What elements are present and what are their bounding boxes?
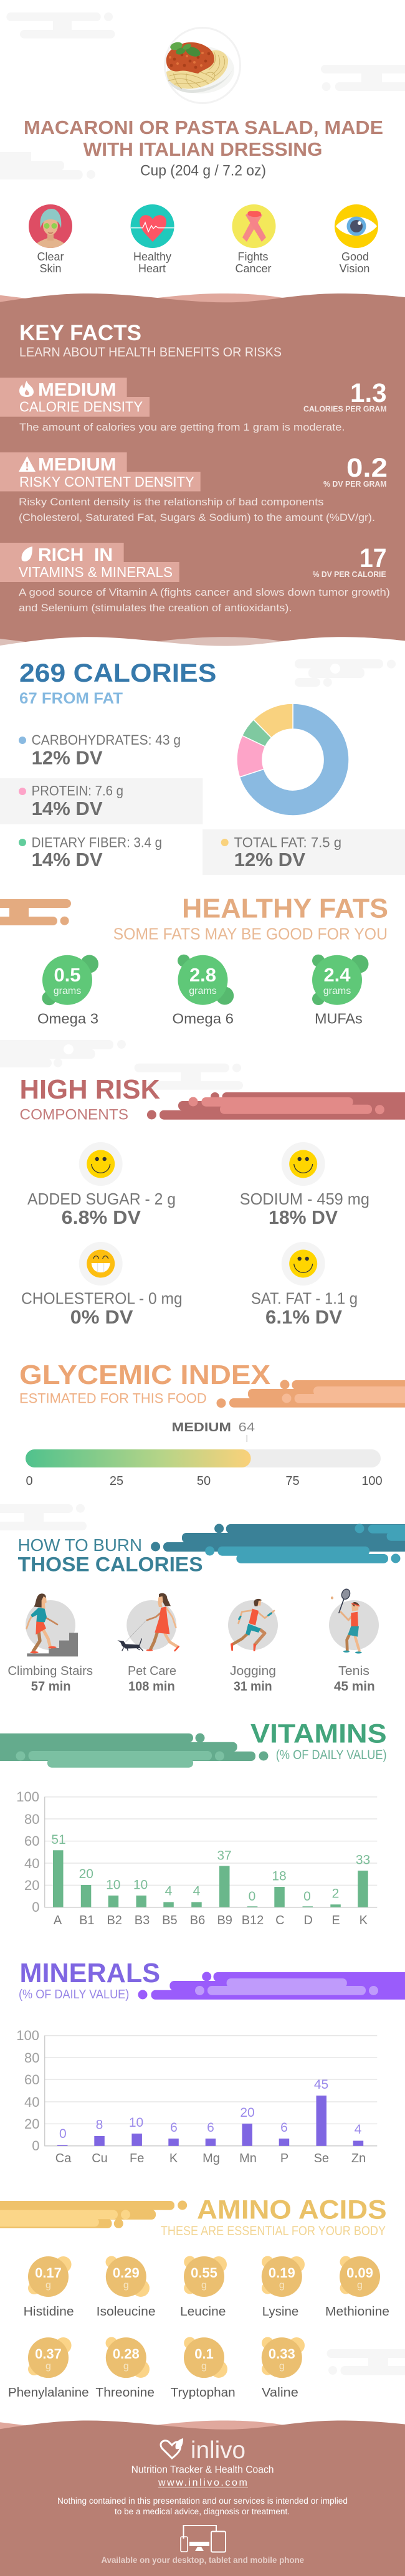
activity: jogging (228, 1599, 278, 1694)
bar chart: vitamins: A (54, 1914, 62, 1927)
bar chart: minerals: Mg (202, 2152, 220, 2165)
title: MACARONI OR PASTA SALAD, MADE (24, 117, 383, 138)
fact: rich in vitamins and minerals: RICH IN (38, 545, 113, 565)
banner decoration: amino acids (0, 2201, 187, 2228)
benefit labels: Cancer (235, 262, 272, 275)
macro: dietary fiber: 14% DV (32, 849, 103, 871)
fact: calorie density: CALORIES PER GRAM (303, 404, 387, 414)
subheading: from fat: 67 FROM FAT (19, 690, 123, 707)
bar chart: vitamins: 40 (24, 1856, 40, 1871)
risk: sodium (240, 1142, 369, 1228)
gauge scale: 25 (110, 1474, 123, 1488)
amino: threonine: g (123, 2361, 129, 2372)
bar chart: vitamins: 20 (24, 1877, 40, 1893)
subheading: (% OF DAILY VALUE) (19, 1988, 129, 2001)
website link: www.inlivo.com (158, 2478, 247, 2488)
amino: leucine: g (201, 2280, 207, 2291)
amino: threonine (95, 2337, 155, 2400)
amino: phenylalanine (8, 2337, 89, 2400)
subheading: components: COMPONENTS (20, 1107, 128, 1123)
amino: isoleucine: Isoleucine (97, 2305, 156, 2319)
amino: methionine: 0.09 (346, 2265, 373, 2281)
activity: pet care (117, 1593, 179, 1694)
panel: high risk components (20, 1074, 405, 1328)
activity: tennis (329, 1588, 379, 1694)
benefit labels: Healthy (133, 250, 171, 263)
panel: key facts (0, 293, 405, 651)
amino: tryptophan: g (201, 2361, 207, 2372)
icon: tennis player (331, 1588, 362, 1654)
benefit labels (37, 250, 369, 275)
bar chart: minerals: 20 (24, 2116, 40, 2132)
activity: climbing stairs: Climbing Stairs (7, 1664, 93, 1678)
panel: minerals (16, 1958, 405, 2165)
gauge scale: 0 (26, 1474, 33, 1488)
heading: calories: 269 CALORIES (19, 658, 216, 687)
bar chart: minerals: 45 (314, 2077, 328, 2092)
icon: warning triangle (19, 456, 36, 472)
bar chart: minerals: 60 (24, 2072, 40, 2087)
bar chart: vitamins: K (360, 1914, 368, 1927)
bar chart: vitamins: C (275, 1914, 285, 1927)
icon: ribbon (232, 204, 275, 248)
bar chart: vitamins: 2 (332, 1887, 339, 1901)
tagline: Nutrition Tracker & Health Coach (131, 2464, 274, 2476)
risk: added sugar: 6.8% DV (62, 1207, 141, 1228)
stat: omega 3: Omega 3 (37, 1011, 98, 1027)
heading: minerals: MINERALS (20, 1958, 160, 1988)
activity: climbing stairs: 57 min (31, 1679, 71, 1694)
panel: burn calories (7, 1524, 405, 1694)
fact: risky content density: (Cholesterol, Saturated Fat, Sugars & Sodium) to the amount (%DV/gr). (19, 512, 375, 523)
benefit labels: Good (341, 250, 369, 263)
bar chart: vitamins: 100 (16, 1789, 39, 1805)
bar chart: minerals: Fe (130, 2152, 144, 2165)
amino: histidine (24, 2256, 74, 2319)
heading: glycemic index: GLYCEMIC INDEX (19, 1360, 270, 1390)
icon: leaf (22, 546, 32, 561)
amino: histidine: Histidine (24, 2305, 74, 2319)
activity: tennis: Tenis (338, 1664, 369, 1678)
gauge scale: 100 (361, 1474, 383, 1488)
benefit labels: Heart (138, 262, 166, 275)
fact: calorie density: The amount of calories you are getting from 1 gram is moderate. (19, 421, 345, 433)
icon: grinning smiley (87, 1250, 115, 1277)
health benefits icons (29, 204, 378, 275)
bar chart: minerals: 0 (59, 2127, 67, 2141)
disclaimer: Nothing contained in this presentation and our services is intended or implied (57, 2496, 348, 2506)
bar chart: minerals: Se (314, 2152, 329, 2165)
subheading: ESTIMATED FOR THIS FOOD (19, 1391, 207, 1406)
amino: tryptophan: 0.1 (194, 2346, 214, 2362)
amino: valine: 0.33 (269, 2346, 295, 2362)
amino: methionine: Methionine (325, 2305, 389, 2319)
risk: sodium: 18% DV (269, 1207, 338, 1228)
stat: omega 6: grams (189, 986, 217, 996)
amino: isoleucine: g (123, 2280, 129, 2291)
fact: risky content density: RISKY CONTENT DENSITY (19, 474, 194, 490)
fact: calorie density: CALORIE DENSITY (19, 399, 143, 415)
activity: jogging: Jogging (230, 1664, 276, 1678)
activity: tennis: 45 min (334, 1679, 375, 1694)
amino: methionine (325, 2256, 389, 2319)
macro: carbohydrates: 12% DV (32, 748, 103, 769)
amino: lysine (262, 2256, 305, 2319)
bar chart: vitamins: E (331, 1914, 340, 1927)
heading: healthy fats: HEALTHY FATS (182, 894, 388, 924)
macro: carbohydrates: CARBOHYDRATES: 43 g (32, 732, 181, 748)
gauge scale (26, 1474, 383, 1488)
benefit labels: Vision (340, 262, 369, 275)
amino: leucine: Leucine (180, 2305, 226, 2319)
macro: dietary fiber: DIETARY FIBER: 3.4 g (32, 834, 162, 850)
bar chart: minerals: Ca (55, 2152, 72, 2165)
amino: threonine: Threonine (95, 2386, 155, 2400)
panel: footer (0, 2420, 405, 2576)
fact: rich in vitamins and minerals: VITAMINS & MINERALS (19, 564, 173, 580)
subheading: SOME FATS MAY BE GOOD FOR YOU (113, 925, 388, 943)
stat: omega 3 (37, 955, 98, 1027)
bar chart: minerals: 6 (170, 2120, 178, 2135)
food photo: spaghetti plate (164, 27, 241, 103)
logo: inlivo: inlivo (191, 2437, 245, 2464)
stat: mufas: grams (323, 986, 351, 996)
bar chart: vitamins: 10 (133, 1878, 148, 1892)
fact: risky content density: MEDIUM (38, 455, 117, 475)
heading: how to burn: HOW TO BURN (18, 1535, 142, 1555)
stat: omega 6 (172, 955, 234, 1027)
serving size: Cup (204 g / 7.2 oz) (140, 162, 266, 179)
bar chart: vitamins: D (303, 1914, 313, 1927)
amino: valine: Valine (262, 2386, 298, 2400)
title (24, 117, 383, 160)
amino: histidine: 0.17 (35, 2265, 62, 2281)
fact: calorie density (0, 378, 387, 433)
amino: lysine: g (279, 2280, 285, 2291)
disclaimer: to be a medical advice, diagnosis or treatment. (115, 2507, 290, 2516)
stat: omega 6: 2.8 (189, 964, 216, 986)
stat: mufas (312, 955, 369, 1027)
panel: calories (0, 658, 405, 875)
amino: valine: g (279, 2361, 285, 2372)
icon: healthy heart (131, 204, 174, 248)
bar chart: vitamins: 0 (32, 1899, 40, 1915)
bar chart: minerals: 80 (24, 2050, 40, 2066)
fact: risky content density: 0.2 (346, 453, 388, 483)
icon: eye (335, 204, 378, 248)
fact: rich in vitamins and minerals: A good source of Vitamin A (fights cancer and slows down tumor growth) (19, 586, 390, 598)
macro: protein (19, 783, 123, 819)
amino: lysine: 0.19 (269, 2265, 295, 2281)
bar chart: minerals: 6 (280, 2120, 288, 2135)
icon: devices (181, 2526, 226, 2552)
bar chart: vitamins: B12 (242, 1914, 264, 1927)
amino: threonine: 0.28 (113, 2346, 140, 2362)
bar chart: vitamins: 10 (106, 1878, 120, 1892)
bar chart: vitamins: B9 (217, 1914, 232, 1927)
fact: risky content density: % DV PER GRAM (323, 479, 387, 489)
bar chart: vitamins: B1 (79, 1914, 95, 1927)
fact: calorie density: 1.3 (350, 378, 387, 408)
macro: total fat: 12% DV (234, 849, 306, 871)
panel: glycemic index (19, 1360, 405, 1488)
benefit labels: Fights (237, 250, 269, 263)
amino: methionine: g (357, 2280, 363, 2291)
heading: those calories: THOSE CALORIES (18, 1553, 202, 1576)
banner decoration: burn (151, 1524, 405, 1563)
bar chart: vitamins: 33 (356, 1853, 370, 1867)
bar chart: vitamins: 20 (79, 1867, 93, 1881)
bar chart: minerals: P (280, 2152, 288, 2165)
subheading: LEARN ABOUT HEALTH BENEFITS OR RISKS (19, 345, 282, 360)
stat: mufas: 2.4 (323, 964, 351, 986)
heading: vitamins: VITAMINS (250, 1720, 387, 1749)
macro: dietary fiber (19, 834, 162, 871)
fact: rich in vitamins and minerals (0, 543, 390, 614)
bar chart: vitamins: B5 (162, 1914, 178, 1927)
macro: total fat (221, 834, 341, 871)
panel: vitamins (0, 1720, 387, 1927)
title: WITH ITALIAN DRESSING (83, 138, 323, 160)
activity: pet care: Pet Care (128, 1664, 176, 1678)
logo: inlivo (161, 2437, 245, 2464)
gauge scale: 75 (285, 1474, 300, 1488)
gauge label: 64 (239, 1421, 255, 1434)
panel: amino acids (0, 2195, 389, 2400)
stat: omega 3: grams (54, 986, 81, 996)
bar chart: minerals: 100 (16, 2028, 39, 2043)
availability note: Available on your desktop, tablet and mobile phone (101, 2555, 304, 2565)
fact: calorie density: MEDIUM (38, 380, 117, 400)
risk: saturated fat: 6.1% DV (265, 1307, 343, 1328)
bar chart: vitamins: B6 (190, 1914, 205, 1927)
bar chart: vitamins: 80 (24, 1811, 40, 1827)
amino: leucine: 0.55 (191, 2265, 217, 2281)
panel: healthy fats (0, 894, 388, 1027)
banner decoration: healthy fats (0, 899, 71, 925)
risk: cholesterol (21, 1242, 183, 1328)
macro: total fat: TOTAL FAT: 7.5 g (234, 834, 341, 850)
amino: tryptophan (171, 2337, 236, 2400)
amino: histidine: g (45, 2280, 51, 2291)
amino: isoleucine: 0.29 (113, 2265, 140, 2281)
fact: rich in vitamins and minerals: and Selenium (stimulates the creation of antioxidants). (19, 602, 292, 614)
heading: key facts: KEY FACTS (19, 321, 141, 345)
banner decoration: vitamins (0, 1734, 268, 1768)
bar chart: vitamins: 0 (303, 1889, 311, 1904)
amino: phenylalanine: 0.37 (35, 2346, 62, 2362)
amino: isoleucine (97, 2256, 156, 2319)
icon: smiley (289, 1250, 317, 1277)
heading: high risk: HIGH RISK (20, 1074, 160, 1105)
bar chart: minerals: Mn (239, 2152, 257, 2165)
bar chart: vitamins: 0 (249, 1889, 255, 1904)
risk: sodium: SODIUM - 459 mg (240, 1190, 369, 1208)
icon: woman climbing stairs (27, 1593, 78, 1656)
activity: jogging: 31 min (234, 1679, 272, 1694)
bar chart: vitamins: B2 (107, 1914, 122, 1927)
bar chart: minerals: Cu (92, 2152, 108, 2165)
donut chart (237, 704, 349, 816)
gauge label (172, 1421, 255, 1442)
macro: carbohydrates (19, 732, 181, 769)
bar chart: vitamins: 51 (51, 1833, 66, 1847)
benefit labels: Clear (37, 250, 64, 263)
risk: saturated fat: SAT. FAT - 1.1 g (251, 1289, 358, 1308)
heading: amino acids: AMINO ACIDS (197, 2195, 387, 2225)
banner decoration: minerals (138, 1972, 405, 2000)
bar chart: minerals (16, 2028, 377, 2165)
bar chart: vitamins: 4 (193, 1884, 201, 1898)
macro: protein: 14% DV (32, 798, 103, 819)
amino: tryptophan: Tryptophan (171, 2386, 236, 2400)
bar chart: minerals: 40 (24, 2094, 40, 2110)
legend row backgrounds (0, 778, 405, 875)
fact: rich in vitamins and minerals: 17 (360, 543, 387, 573)
icon: flame (19, 381, 34, 397)
icon: clear skin (29, 204, 72, 249)
bar chart: vitamins: B3 (135, 1914, 150, 1927)
fact: rich in vitamins and minerals: % DV PER CALORIE (313, 570, 386, 579)
subheading: (% OF DAILY VALUE) (276, 1748, 387, 1762)
risk: cholesterol: CHOLESTEROL - 0 mg (21, 1289, 183, 1308)
risk: added sugar: ADDED SUGAR - 2 g (27, 1190, 176, 1208)
fact: risky content density: Risky Content density is the relationship of bad components (19, 496, 324, 508)
amino: lysine: Lysine (262, 2305, 298, 2319)
glycemic gauge bar (26, 1449, 381, 1467)
bar chart: minerals: Zn (351, 2152, 366, 2165)
icon: jogger (231, 1599, 274, 1651)
benefit labels: Skin (39, 262, 62, 275)
amino: phenylalanine: Phenylalanine (8, 2386, 89, 2400)
bar chart: minerals: K (169, 2152, 178, 2165)
risk: cholesterol: 0% DV (70, 1307, 133, 1328)
bar chart: minerals: 20 (240, 2106, 255, 2120)
bar chart: minerals: 0 (32, 2138, 40, 2154)
icon: smiley (87, 1150, 115, 1178)
stat: mufas: MUFAs (315, 1011, 363, 1027)
activity: pet care: 108 min (128, 1679, 175, 1694)
risk: saturated fat (251, 1242, 358, 1328)
bar chart: minerals: 10 (129, 2116, 143, 2130)
bar chart: vitamins: 60 (24, 1833, 40, 1849)
banner decoration: high risk (147, 1092, 405, 1120)
bar chart: vitamins: 18 (272, 1869, 287, 1884)
icon: woman walking dog (117, 1593, 179, 1651)
bar chart: minerals: 8 (96, 2117, 103, 2132)
gauge label: MEDIUM (172, 1421, 231, 1434)
banner decoration: glycemic (217, 1380, 405, 1408)
macro: protein: PROTEIN: 7.6 g (32, 783, 123, 799)
risk: added sugar (27, 1142, 176, 1228)
bar chart: minerals: 4 (355, 2122, 362, 2137)
amino: phenylalanine: g (45, 2361, 51, 2372)
stat: omega 6: Omega 6 (172, 1011, 234, 1027)
gauge scale: 50 (197, 1474, 211, 1488)
stat: omega 3: 0.5 (54, 964, 81, 986)
bar chart: minerals: 6 (207, 2120, 214, 2135)
bar chart: vitamins (16, 1789, 377, 1927)
disclaimer (57, 2496, 348, 2516)
amino: valine (262, 2337, 305, 2400)
amino: leucine (180, 2256, 227, 2319)
activity: climbing stairs (7, 1593, 93, 1694)
fact: risky content density (0, 452, 388, 523)
bar chart: vitamins: 37 (217, 1848, 232, 1863)
bar chart: vitamins: 4 (165, 1884, 173, 1898)
icon: smiley (289, 1150, 317, 1178)
